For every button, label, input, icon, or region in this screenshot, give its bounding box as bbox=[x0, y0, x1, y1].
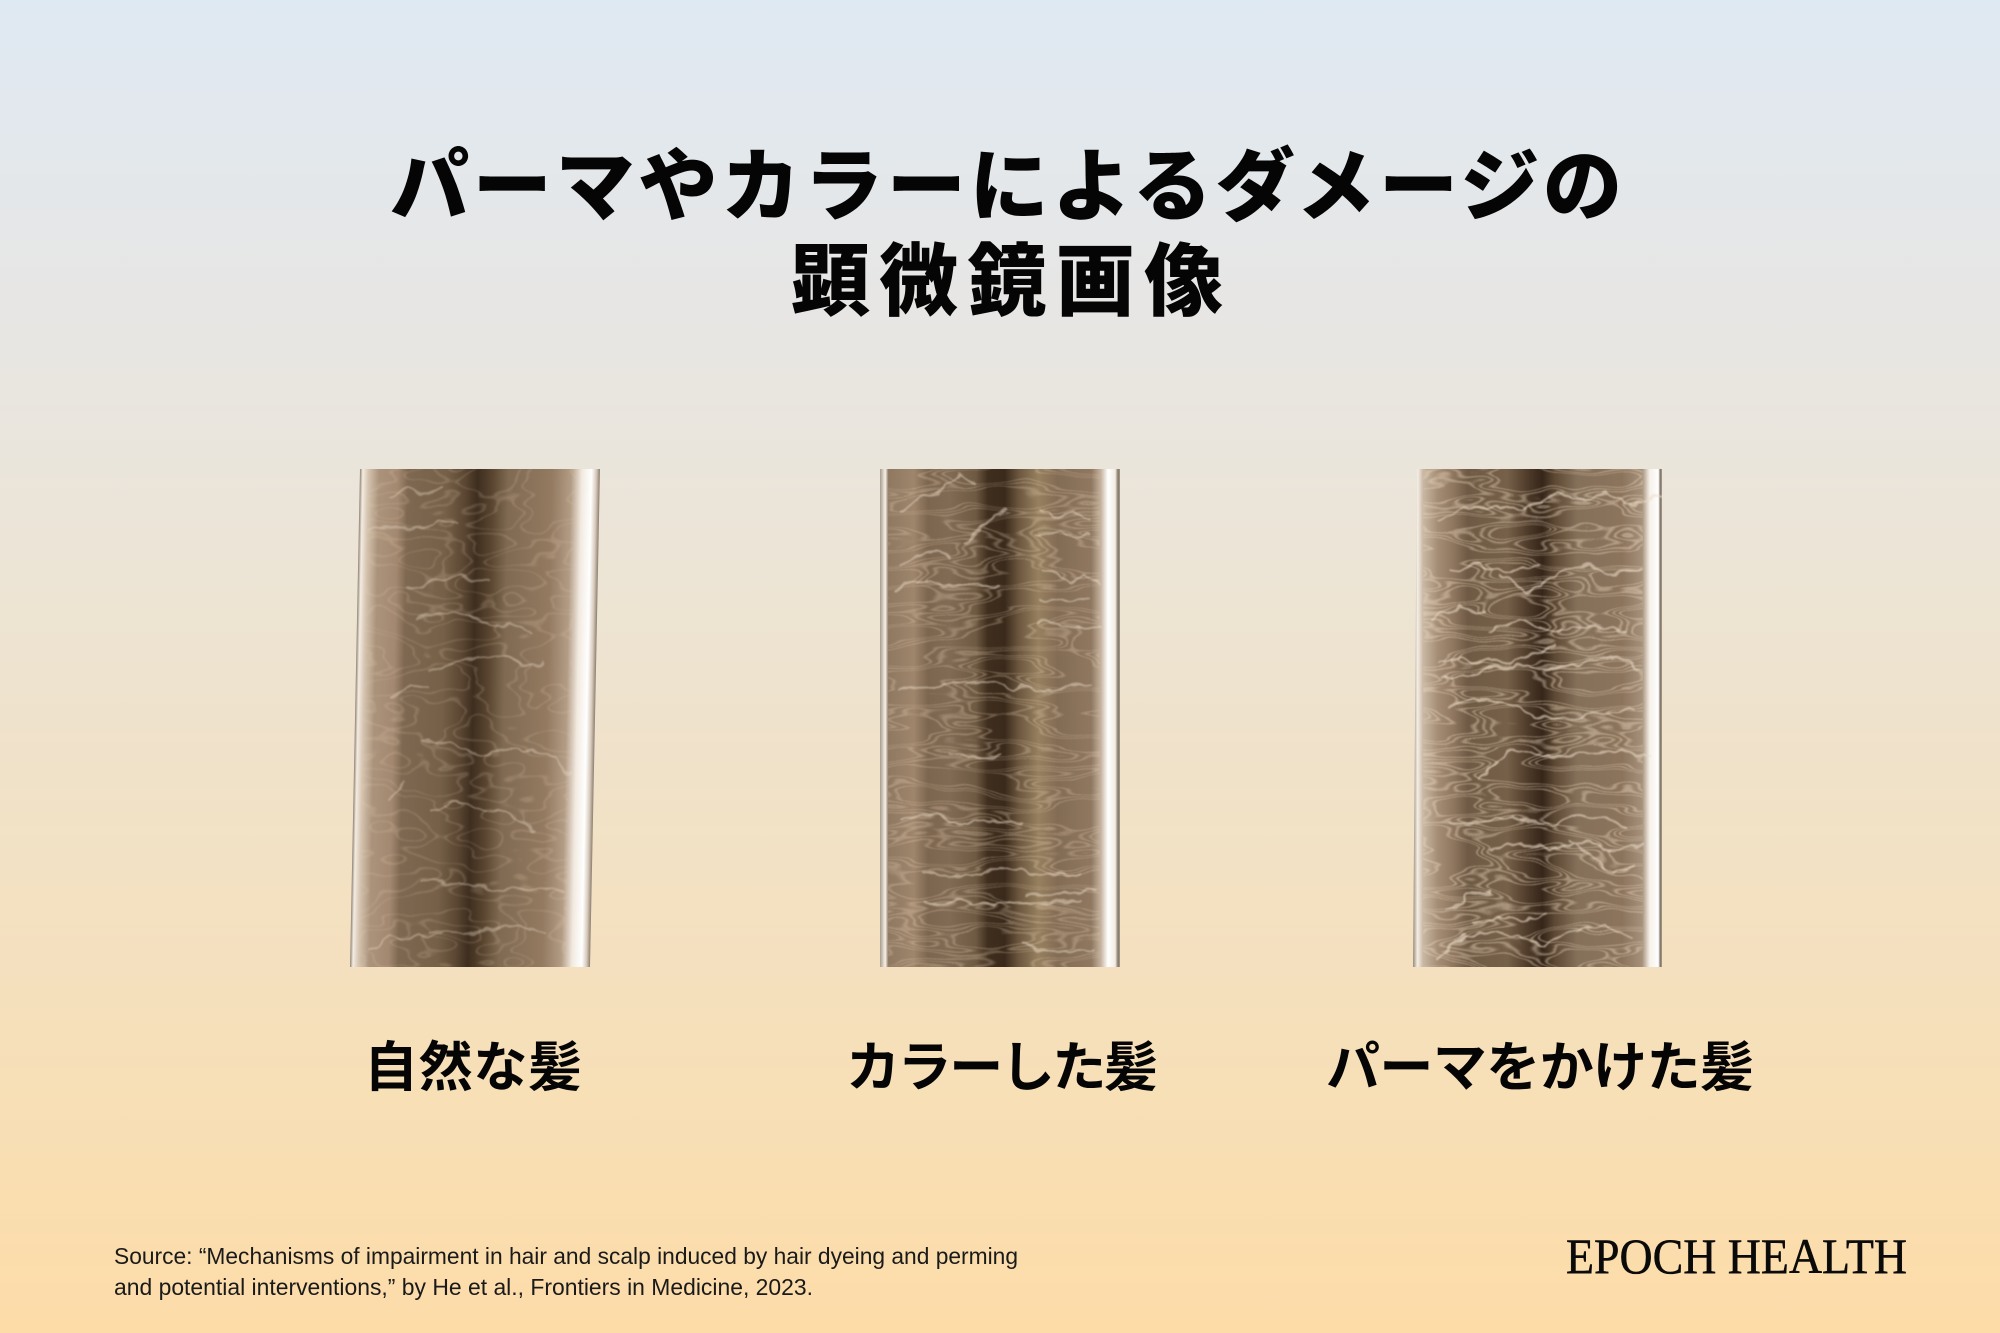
image: permed hair micrograph bbox=[1413, 469, 1663, 967]
title: 顕微鏡画像 bbox=[791, 237, 1223, 326]
label: permed hair: パーマをかけた髪 bbox=[1326, 1038, 1754, 1098]
source note: and potential interventions,” by He et al., Frontiers in Medicine, 2023. bbox=[114, 1274, 813, 1300]
source note bbox=[114, 1243, 1018, 1300]
logo: Epoch Health: EPOCH HEALTH bbox=[1566, 1228, 1907, 1284]
source note: Source: “Mechanisms of impairment in hair and scalp induced by hair dyeing and perming bbox=[114, 1243, 1018, 1269]
image: dyed hair micrograph bbox=[880, 469, 1120, 967]
label: natural hair: 自然な髪 bbox=[364, 1038, 582, 1098]
title: パーマやカラーによるダメージの bbox=[390, 142, 1622, 231]
label: dyed hair: カラーした髪 bbox=[846, 1038, 1158, 1098]
title bbox=[390, 142, 1622, 326]
panel: natural hair bbox=[350, 469, 600, 967]
panel: permed hair bbox=[1413, 469, 1663, 967]
image: natural hair micrograph bbox=[350, 469, 600, 967]
panel: dyed hair bbox=[880, 469, 1120, 967]
